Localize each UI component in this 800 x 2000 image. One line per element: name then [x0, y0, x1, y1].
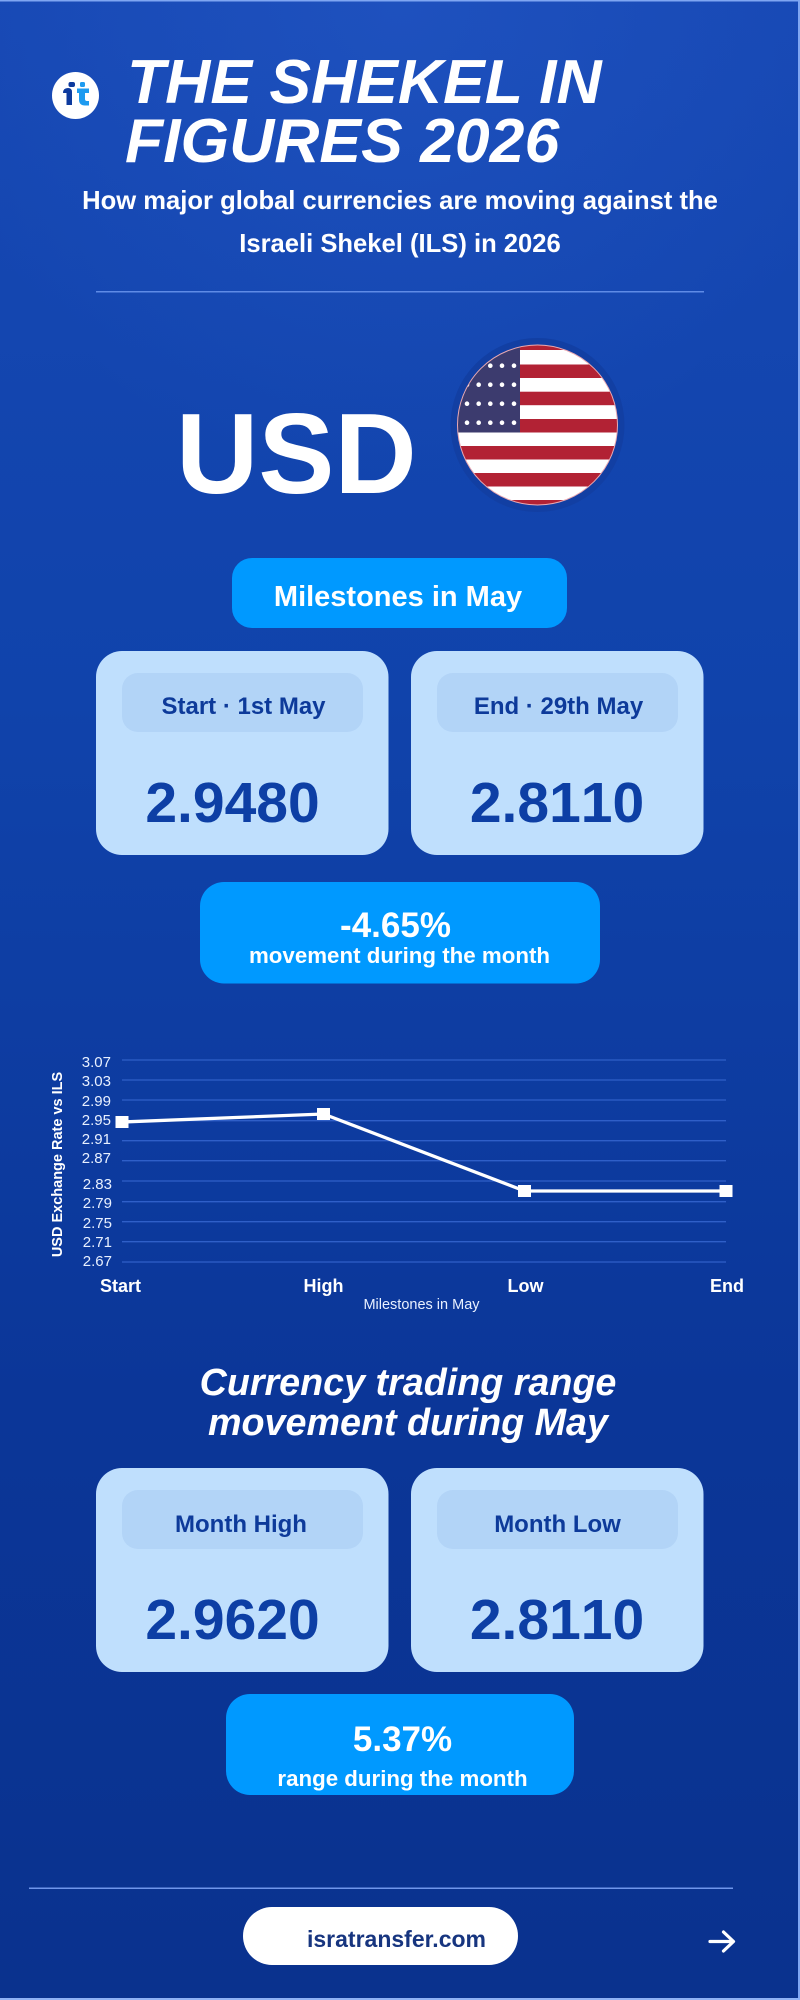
- card: start: [96, 651, 388, 855]
- callout: monthly movement: -4.65%: [340, 906, 451, 945]
- y axis labels: 2.91: [82, 1131, 111, 1148]
- data line: [116, 1108, 732, 1197]
- y axis labels: [82, 1054, 112, 1270]
- section heading: trading range: [200, 1361, 616, 1443]
- subtitle: Israeli Shekel (ILS) in 2026: [239, 230, 561, 258]
- footer link pill: [243, 1907, 518, 1965]
- card: month high: Month High: [175, 1511, 307, 1538]
- x axis labels: Start: [100, 1276, 141, 1296]
- title: FIGURES 2026: [125, 106, 560, 176]
- heading pill: milestones: [232, 558, 567, 628]
- section heading: trading range: movement during May: [208, 1401, 610, 1443]
- y axis labels: 3.03: [82, 1073, 111, 1090]
- card: end: End · 29th May: [474, 693, 644, 720]
- subtitle: [82, 187, 718, 258]
- icon: arrow: [710, 1932, 734, 1951]
- card: start: 2.9480: [145, 771, 320, 835]
- y axis labels: 2.67: [83, 1253, 112, 1270]
- card: month high: [96, 1468, 388, 1672]
- heading pill: milestones: Milestones in May: [274, 581, 522, 613]
- y axis labels: 2.95: [82, 1112, 111, 1129]
- y axis labels: 2.79: [83, 1195, 112, 1212]
- line chart: [50, 1054, 744, 1313]
- y axis labels: 2.71: [83, 1234, 112, 1251]
- card: month low: [411, 1468, 704, 1672]
- y axis title: USD Exchange Rate vs ILS: [50, 1072, 66, 1257]
- x axis labels: [100, 1276, 744, 1296]
- card: month low: Month Low: [494, 1511, 621, 1538]
- icon: logo: [52, 72, 99, 119]
- x axis labels: High: [304, 1276, 344, 1296]
- section heading: trading range: Currency trading range: [200, 1361, 616, 1403]
- card: month high: 2.9620: [145, 1588, 320, 1652]
- card: end: 2.8110: [470, 771, 644, 835]
- callout: monthly movement: movement during the month: [249, 943, 550, 968]
- title: THE SHEKEL IN: [127, 47, 603, 117]
- callout: monthly range: range during the month: [277, 1766, 528, 1791]
- callout: monthly range: 5.37%: [353, 1720, 452, 1759]
- y axis labels: 2.99: [82, 1093, 111, 1110]
- header divider: [96, 291, 704, 292]
- card: end: [411, 651, 704, 855]
- y axis labels: 2.75: [83, 1215, 112, 1232]
- y axis labels: 2.87: [82, 1150, 111, 1167]
- footer divider: [29, 1888, 733, 1889]
- card: start: Start · 1st May: [161, 693, 326, 720]
- x axis labels: Low: [508, 1276, 544, 1296]
- x axis title: Milestones in May: [363, 1297, 480, 1313]
- callout: monthly movement: [200, 882, 600, 984]
- subtitle: How major global currencies are moving against the: [82, 187, 718, 215]
- y axis labels: 3.07: [82, 1054, 111, 1071]
- icon: US flag: [450, 338, 625, 512]
- y axis labels: 2.83: [83, 1176, 112, 1193]
- card: month low: 2.8110: [470, 1588, 644, 1652]
- callout: monthly range: [226, 1694, 574, 1795]
- currency code: USD: [176, 391, 417, 518]
- x axis labels: End: [710, 1276, 744, 1296]
- footer link pill: isratransfer.com: [307, 1926, 486, 1952]
- title: [125, 47, 603, 176]
